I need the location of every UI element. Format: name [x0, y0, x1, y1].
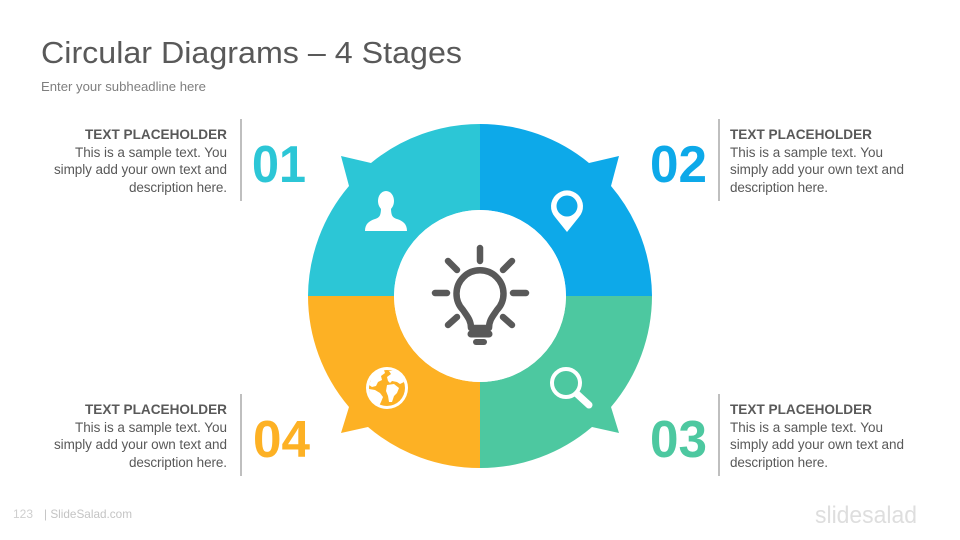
subtitle: Enter your subheadline here: [41, 79, 206, 94]
number 01: 01: [252, 136, 306, 194]
body 02: description here.: [730, 180, 828, 195]
icon: magnifier: [552, 369, 589, 405]
body 01: description here.: [129, 180, 227, 195]
segment 2: blue: [480, 124, 652, 296]
heading 01: TEXT PLACEHOLDER: [85, 126, 227, 142]
segment 4: orange: [308, 296, 480, 468]
callout 04: [54, 394, 310, 476]
body 04: description here.: [129, 455, 227, 470]
heading 02: TEXT PLACEHOLDER: [730, 126, 872, 142]
callout 02: [650, 119, 904, 201]
footer site name: | SlideSalad.com: [44, 507, 132, 521]
circular diagram: [308, 124, 652, 468]
footer logo: slidesalad: [815, 502, 917, 529]
center circle with bulb: [394, 210, 566, 382]
body 02: [730, 145, 904, 195]
body 03: simply add your own text and: [730, 437, 904, 452]
icon: person: [365, 191, 407, 231]
title: Circular Diagrams – 4 Stages: [41, 35, 462, 70]
icon: globe: [366, 367, 408, 409]
body 01: simply add your own text and: [54, 162, 227, 177]
segment 1: teal: [308, 124, 480, 296]
callout 01: [54, 119, 306, 201]
body 04: [54, 420, 227, 470]
callout 03: [650, 394, 904, 476]
body 01: This is a sample text. You: [75, 145, 227, 160]
body 01: [54, 145, 227, 195]
number 03: 03: [650, 411, 707, 469]
heading 04: TEXT PLACEHOLDER: [85, 401, 227, 417]
icon: light bulb: [435, 248, 526, 342]
segment 3: green: [480, 296, 652, 468]
body 04: simply add your own text and: [54, 437, 227, 452]
heading 03: TEXT PLACEHOLDER: [730, 401, 872, 417]
number 02: 02: [650, 136, 707, 194]
body 03: description here.: [730, 455, 828, 470]
footer page number: 123: [13, 507, 33, 521]
body 04: This is a sample text. You: [75, 420, 227, 435]
body 02: This is a sample text. You: [730, 145, 883, 160]
body 03: This is a sample text. You: [730, 420, 883, 435]
body 02: simply add your own text and: [730, 162, 904, 177]
body 03: [730, 420, 904, 470]
number 04: 04: [253, 411, 310, 469]
icon: map pin: [551, 190, 583, 232]
